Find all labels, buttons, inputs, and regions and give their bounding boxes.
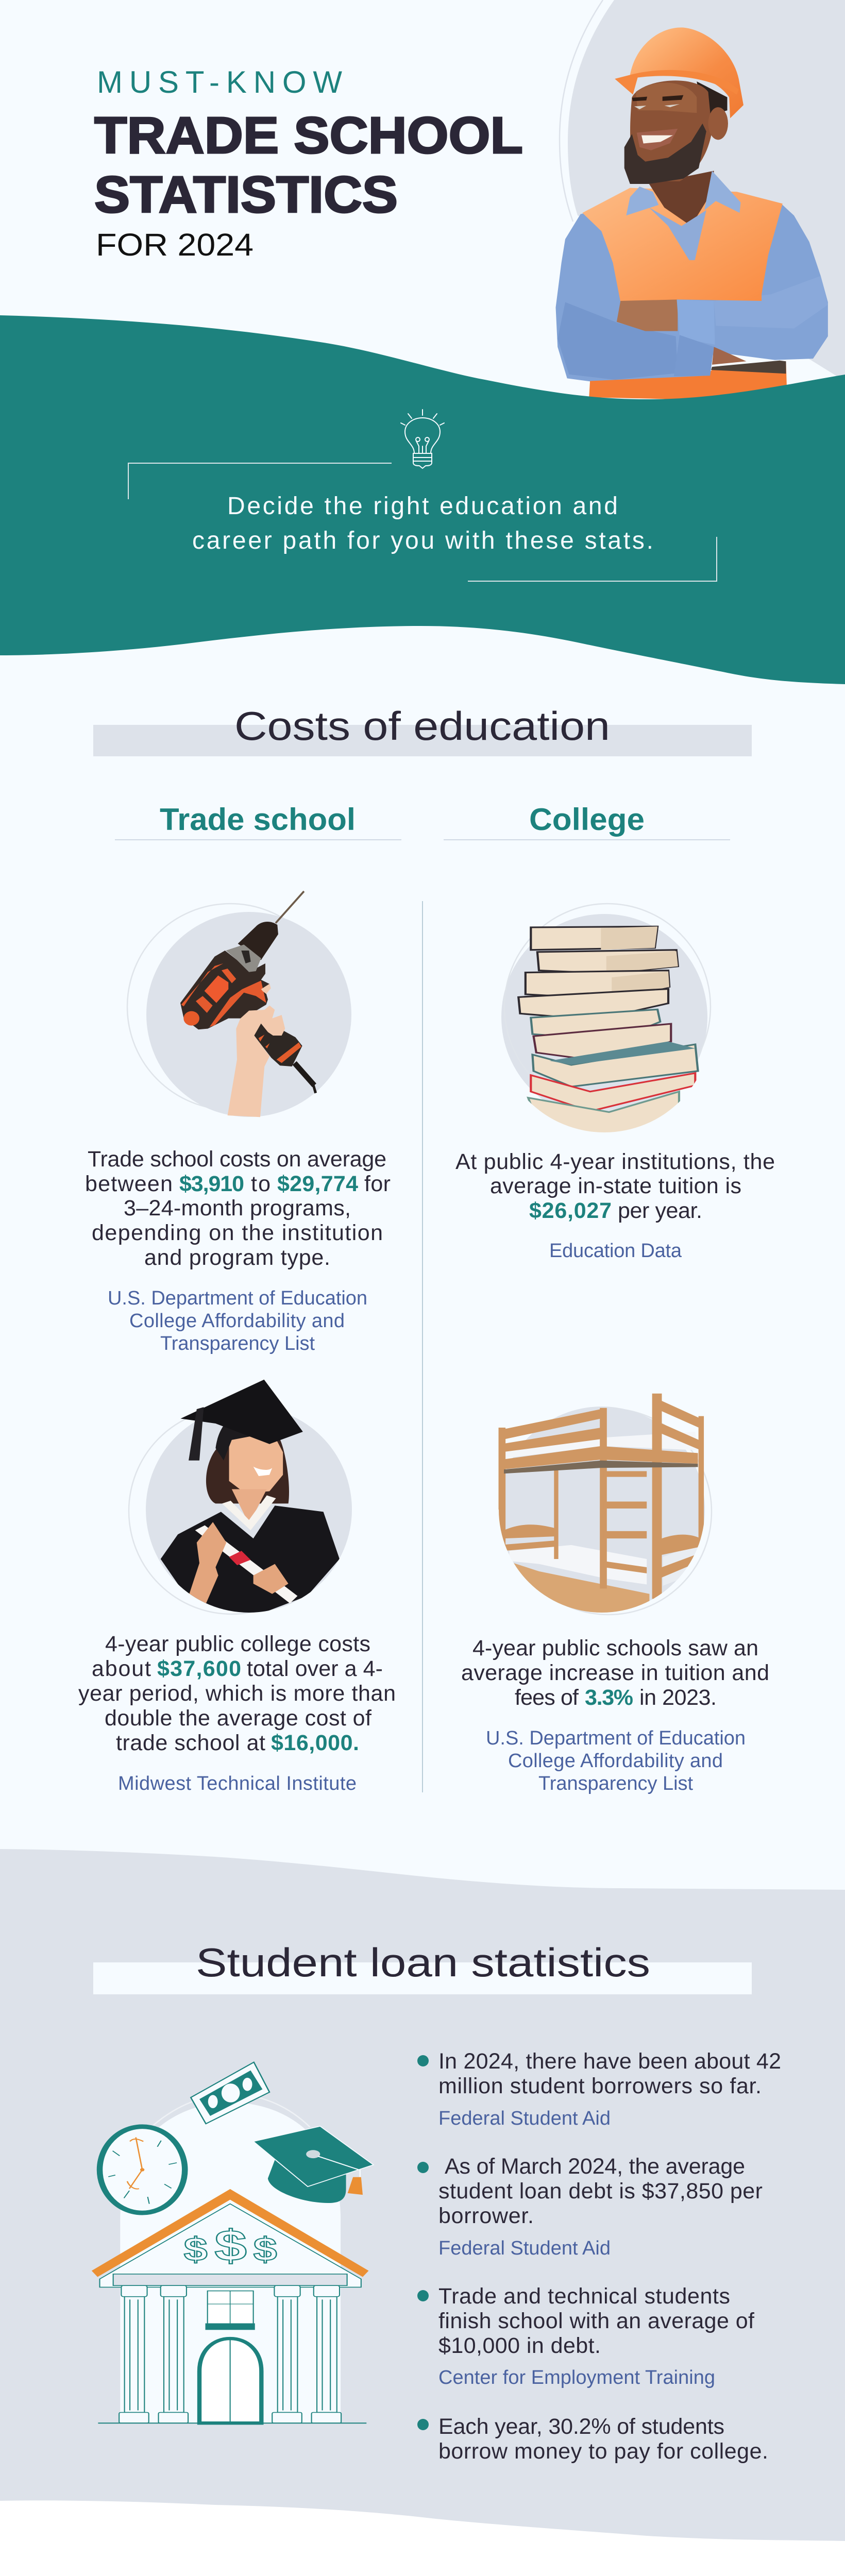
intro text: Decide the right education and [227, 493, 618, 520]
column heading: college: College [529, 802, 645, 837]
text: trade school cost: between [85, 1172, 173, 1196]
eyebrow: must-know: MUST-KNOW [97, 65, 342, 99]
icon: money bill [191, 2062, 269, 2124]
bullet: student borrowers: In 2024, there have been about 42 [438, 2049, 781, 2074]
source: us department of education: College Affordability and [508, 1750, 723, 1772]
hero blob outline [560, 0, 603, 222]
text: four-year college costs: year period, which is more than [78, 1681, 396, 1706]
image: bunk bed [499, 1394, 712, 1617]
source: us department of education [108, 1287, 367, 1354]
bullet: students borrowing [417, 2414, 768, 2464]
bank building [92, 2189, 368, 2423]
source: us department of education: College Affordability and [129, 1310, 345, 1332]
bullet: average debt: borrower. [438, 2204, 534, 2228]
text: college tuition: average in-state tuition is [490, 1174, 741, 1198]
bullet: student borrowers: Federal Student Aid [438, 2108, 611, 2129]
bullet: trade students debt: Center for Employment Training [438, 2367, 715, 2388]
text: trade school cost: to [251, 1172, 271, 1196]
source: us department of education: Transparency List [538, 1773, 693, 1794]
text: tuition increase: 4-year public schools saw an [472, 1636, 758, 1660]
intro text [192, 493, 653, 554]
text: four-year college costs [78, 1632, 396, 1755]
text: tuition increase [461, 1636, 769, 1710]
title block [94, 65, 523, 262]
text: trade school cost [85, 1147, 391, 1270]
text: tuition increase: in 2023. [639, 1685, 717, 1710]
column heading: trade school: Trade school [160, 802, 356, 837]
bank building: $ [184, 2231, 208, 2267]
source: midwest technical institute: Midwest Technical Institute [118, 1773, 357, 1794]
panel: student loan section background [0, 1849, 845, 2541]
text: tuition increase: fees of [515, 1685, 579, 1710]
title line 1: TRADE SCHOOL [94, 107, 523, 164]
section heading: costs of education: Costs of education [234, 703, 610, 749]
source: us department of education: U.S. Department of Education [486, 1727, 746, 1749]
bank building: $ [254, 2231, 277, 2267]
text: trade school cost: Trade school costs on average [88, 1147, 386, 1172]
intro bracket frame [128, 463, 717, 581]
text: four-year college costs: about [92, 1656, 151, 1681]
illustration: bank with clock, cap and money [92, 2062, 374, 2423]
text: four-year college costs: total over a 4- [247, 1656, 383, 1681]
bullet: students borrowing: borrow money to pay for college. [438, 2439, 768, 2464]
title line 2: STATISTICS [94, 166, 398, 224]
text: trade school cost: 3–24-month programs, [124, 1196, 351, 1221]
source: education data: Education Data [549, 1240, 682, 1262]
text: trade school cost: $3,910 [179, 1172, 244, 1196]
bullet: trade students debt: finish school with an average of [438, 2309, 755, 2333]
bullet: student borrowers: million student borrowers so far. [438, 2074, 762, 2098]
source: us department of education: U.S. Department of Education [108, 1287, 367, 1309]
image: stack of books [501, 904, 711, 1134]
source: us department of education [486, 1727, 746, 1794]
bullet: student borrowers [417, 2049, 781, 2129]
icon: graduation cap [254, 2126, 374, 2203]
text: four-year college costs: double the average cost of [105, 1706, 372, 1731]
title line 3: FOR 2024 [96, 227, 254, 262]
bullet: trade students debt [417, 2284, 755, 2388]
icon: clock [100, 2127, 185, 2213]
bullet: average debt [417, 2154, 763, 2259]
section heading: student loan statistics: Student loan statistics [196, 1940, 650, 1985]
icon: light bulb [401, 410, 444, 468]
text: college tuition [455, 1149, 775, 1223]
bullet: trade students debt: $10,000 in debt. [438, 2333, 601, 2358]
bank building: $ [214, 2221, 247, 2270]
column divider [422, 901, 423, 1792]
intro text: career path for you with these stats. [192, 527, 653, 554]
text: four-year college costs: $37,600 [157, 1656, 241, 1681]
image: graduate [129, 1380, 352, 1615]
text: trade school cost: for [364, 1172, 391, 1196]
text: trade school cost: and program type. [144, 1245, 330, 1270]
bullet: students borrowing: Each year, 30.2% of students [438, 2414, 724, 2439]
section heading: costs of education [93, 703, 752, 756]
teal hero wave band [0, 315, 845, 684]
text: college tuition: $26,027 [529, 1198, 612, 1223]
text: trade school cost: $29,774 [277, 1172, 358, 1196]
page background: top panel [0, 0, 845, 1958]
text: trade school cost: depending on the institution [92, 1221, 383, 1245]
bullet: average debt: As of March 2024, the average [445, 2154, 745, 2179]
bullet: average debt: student loan debt is $37,850 per [438, 2179, 763, 2204]
bullet: average debt: Federal Student Aid [438, 2238, 611, 2259]
source: us department of education: Transparency List [160, 1333, 315, 1354]
text: tuition increase: 3.3% [585, 1685, 633, 1710]
bullet: trade students debt: Trade and technical students [438, 2284, 730, 2309]
text: four-year college costs: 4-year public college costs [105, 1632, 370, 1656]
hero worker photo [555, 27, 828, 399]
image: drill in hand [127, 891, 351, 1117]
text: four-year college costs: $16,000. [271, 1731, 359, 1755]
hero gray blob [568, 0, 845, 381]
text: four-year college costs: trade school at [116, 1731, 265, 1755]
text: tuition increase: average increase in tuition and [461, 1660, 769, 1685]
text: college tuition: At public 4-year institutions, the [455, 1149, 775, 1174]
text: college tuition: per year. [618, 1198, 702, 1223]
section heading: student loan statistics [93, 1940, 752, 1994]
